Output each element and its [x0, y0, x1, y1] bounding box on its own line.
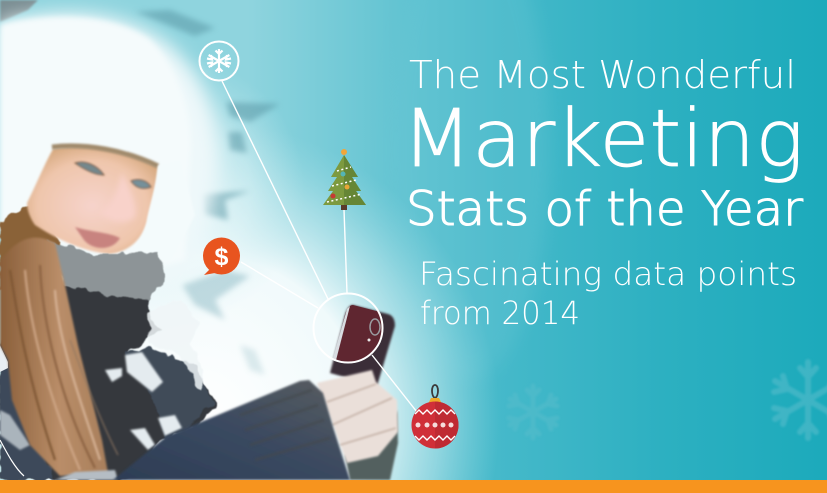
hair top [0, 205, 60, 290]
subtitle: Fascinating data points [419, 255, 797, 293]
photo: girl with phone [0, 13, 398, 480]
title: Marketing [402, 93, 804, 185]
phone inside lens [333, 305, 382, 362]
background tree shadows [135, 10, 280, 375]
hand [317, 370, 398, 463]
snowflake: large [774, 362, 827, 438]
subtitle: from 2014 [420, 294, 580, 332]
phone [330, 305, 395, 386]
right fur over cheek [128, 160, 195, 262]
phone highlight circle [314, 294, 382, 362]
top corner tree [0, 0, 38, 22]
orange footer bar [0, 480, 827, 493]
icon: christmas tree [323, 149, 366, 210]
title [402, 53, 804, 237]
title: The Most Wonderful [409, 53, 796, 97]
background upper glow [0, 0, 340, 340]
cuff ribbing [240, 390, 330, 460]
snowflake: small [509, 386, 557, 438]
right eye [131, 180, 151, 188]
scarf dark [0, 280, 216, 480]
icon: snowflake [200, 42, 238, 80]
finger lines [327, 384, 396, 445]
far sleeve [345, 410, 398, 480]
nose [100, 172, 136, 222]
left scarf edge [0, 345, 55, 480]
earphone cable [0, 440, 24, 476]
long hair [0, 238, 108, 476]
subtitle [419, 255, 797, 332]
scarf blue fold [125, 348, 213, 440]
sweater sleeve [113, 380, 350, 480]
connector lines [222, 81, 417, 412]
left eye [75, 162, 104, 175]
fur fringe [52, 146, 158, 166]
icon: dollar bubble [203, 238, 240, 275]
grey fluff [55, 470, 118, 480]
background white glow [0, 0, 560, 480]
hair strands [10, 265, 118, 470]
icon: dollar bubble: $ [215, 243, 229, 271]
background snowflakes [509, 362, 827, 438]
fur hat [0, 13, 218, 285]
face [27, 147, 158, 254]
scarf light fold [47, 240, 165, 300]
scarf frayed white [148, 300, 205, 392]
scarf pattern [105, 352, 182, 450]
lips [75, 227, 120, 248]
background soft light band [390, 0, 550, 380]
icon: bauble [412, 385, 458, 448]
title: Stats of the Year [406, 182, 804, 237]
